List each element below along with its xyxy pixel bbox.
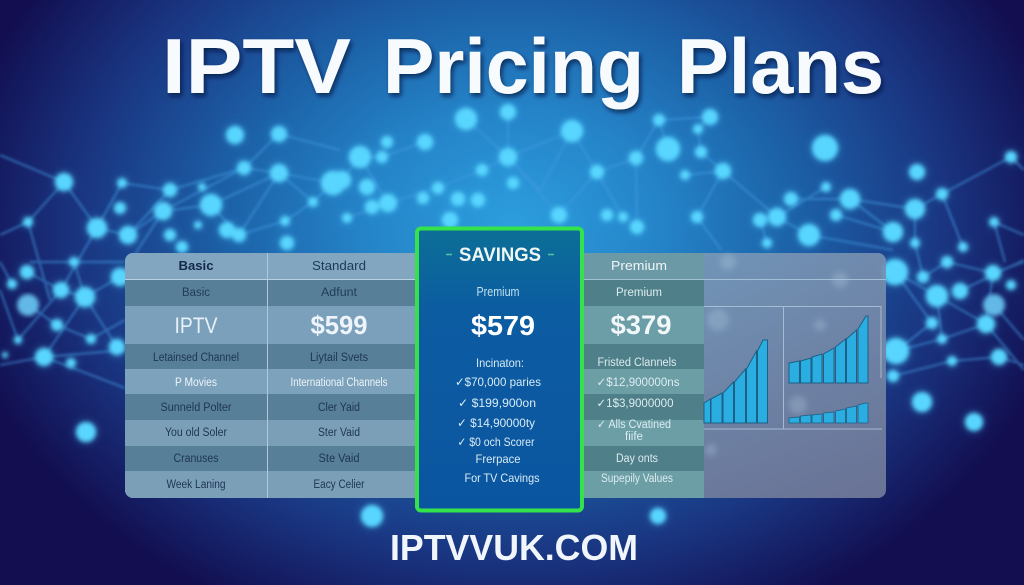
column: basic [153, 258, 239, 491]
pale large nodes [17, 294, 1005, 316]
column: standard: Ste Vaid [318, 453, 360, 465]
panel: savings highlight card [417, 228, 582, 510]
column: basic: Basic [182, 287, 210, 299]
column: basic: IPTV [174, 313, 218, 338]
title: Plans [677, 22, 884, 110]
network of glowing nodes [0, 104, 1024, 527]
column: basic: Sunneld Polter [160, 402, 232, 414]
column: basic: You old Soler [165, 427, 227, 439]
column: standard: Adfunt [321, 287, 358, 299]
card feature list: For TV Cavings [464, 471, 540, 485]
premium column rows [583, 253, 886, 498]
title [162, 22, 884, 110]
column: premium: Fristed Clannels [598, 357, 677, 369]
column: premium: ✓1$3,9000000 [596, 398, 674, 410]
basic and standard column rows [125, 253, 415, 498]
card feature list: ✓ $199,900on [458, 396, 536, 410]
heading dashes [446, 254, 554, 256]
bar chart: lower small [789, 403, 868, 423]
column: basic: Letainsed Channel [153, 352, 239, 364]
column: basic: Cranuses [174, 453, 219, 465]
column: standard: Liytail Svets [310, 352, 368, 364]
column: basic: Basic [178, 258, 214, 273]
card plan name: Premium [476, 285, 520, 299]
title: IPTV [162, 22, 351, 110]
pricing table panel [125, 253, 886, 498]
card feature list: Frerpace [476, 452, 521, 466]
card price: $579 [471, 310, 535, 341]
column: premium [596, 258, 680, 485]
panel: glass background [125, 253, 886, 498]
column: standard [290, 258, 388, 491]
title: Pricing [383, 22, 644, 110]
card feature list: ✓ $0 och Scorer [458, 435, 534, 449]
column: standard: Cler Yaid [318, 402, 360, 414]
bar chart: upper rising [789, 316, 868, 383]
column: standard: Eacy Celier [314, 479, 365, 491]
column: standard: Standard [312, 258, 366, 273]
card heading: SAVINGS [459, 245, 541, 266]
column: premium: Supepily Values [601, 473, 673, 485]
column: standard: Ster Vaid [318, 427, 360, 439]
column: premium: $379 [610, 310, 672, 340]
card feature list [455, 356, 541, 485]
column: premium: Day onts [616, 453, 658, 465]
pale nodes showing through glass [705, 254, 848, 456]
chart frame [704, 306, 882, 429]
column: basic: P Movies [175, 377, 217, 389]
column: premium: fiife [625, 431, 643, 443]
column: standard: International Channels [290, 377, 388, 389]
column: premium: ✓ Alls Cvatined [597, 419, 671, 431]
column: premium: Premium [611, 258, 667, 273]
column: standard: $599 [310, 310, 368, 340]
column: premium: Premium [616, 287, 662, 299]
column: premium: ✓$12,900000ns [596, 377, 680, 389]
column: basic: Week Laning [166, 479, 226, 491]
card feature list: ✓ $14,90000ty [457, 416, 535, 430]
card feature list: ✓$70,000 paries [455, 375, 541, 389]
footer website address: IPTVVUK.COM [390, 527, 638, 568]
card feature list: Incinaton: [476, 356, 524, 370]
bar chart: large rising [704, 340, 768, 423]
